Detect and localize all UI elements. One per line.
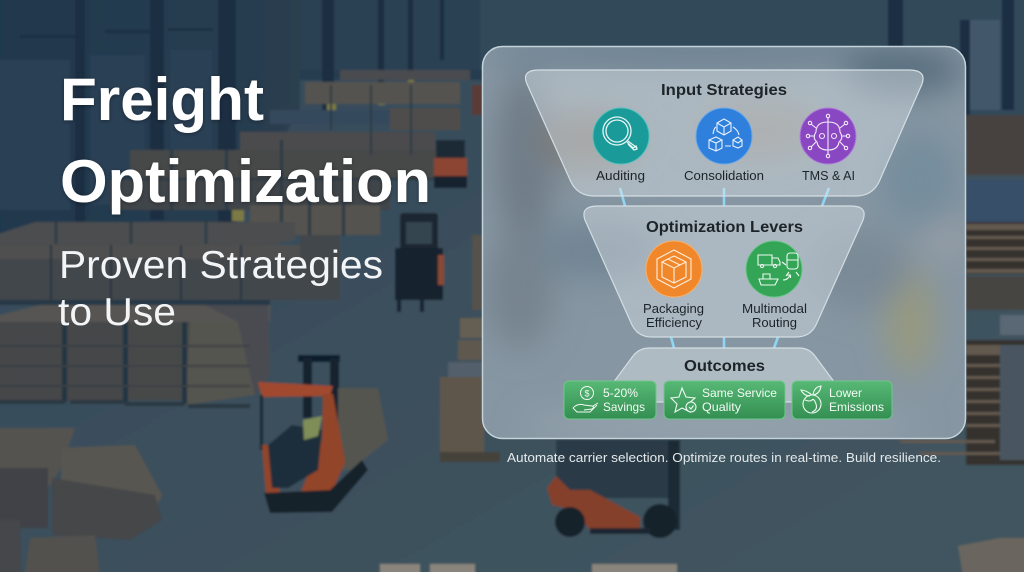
subtitle: Proven Strategies [59,244,383,287]
right-edge pallet stacks [900,115,1024,572]
pill: lower emissions: Emissions [829,400,884,414]
pill: savings: Savings [603,400,645,414]
title: Optimization [60,148,431,215]
panel: frosted glass funnel [480,34,970,465]
pill: same service quality: Same Service [702,386,777,400]
forklift: dark [395,213,444,312]
panel: outcomes [564,348,892,419]
icon: consolidation [696,108,752,164]
lower-left pallets [0,428,162,572]
icon: auditing [593,108,649,164]
panel: optimization levers [584,206,864,337]
label: packaging efficiency [643,302,704,330]
forklift: small far [434,85,482,188]
label: TMS and AI: TMS & AI [802,168,855,183]
forklift: orange reach truck [258,355,388,513]
label: auditing: Auditing [596,168,645,183]
pill: savings: $ [584,388,590,398]
mid-left pallet block [0,222,340,408]
pill: savings: 5-20% [603,386,638,400]
icon: multimodal [746,241,802,297]
caption: Automate carrier selection. Optimize routes in real-time. Build resilience. [507,451,941,465]
icon: TMS and AI [800,108,856,164]
label: packaging efficiency: Packaging [643,302,704,316]
pill: same service quality [664,381,785,419]
panel: input strategies [526,70,923,196]
pill: same service quality: Quality [702,400,741,414]
center pallets under panel [380,235,677,572]
icon: packaging [646,241,702,297]
heading: Outcomes [684,358,765,375]
label: multimodal routing: Multimodal [742,302,807,316]
title [60,66,431,215]
subtitle [58,244,383,334]
pill: lower emissions: Lower [829,386,862,400]
pill: savings [564,381,656,419]
label: packaging efficiency: Efficiency [646,316,703,330]
forklift: bottom blurred [547,440,680,538]
heading: Input Strategies [661,82,787,99]
label: multimodal routing: Routing [752,316,797,330]
far pallet rows [110,70,470,236]
heading: Optimization Levers [646,219,803,236]
label: multimodal routing [742,302,807,330]
title: Freight [60,66,264,133]
subtitle: to Use [58,291,176,334]
label: consolidation: Consolidation [684,168,764,183]
pill: lower emissions [792,381,892,419]
connector lines [620,188,829,348]
